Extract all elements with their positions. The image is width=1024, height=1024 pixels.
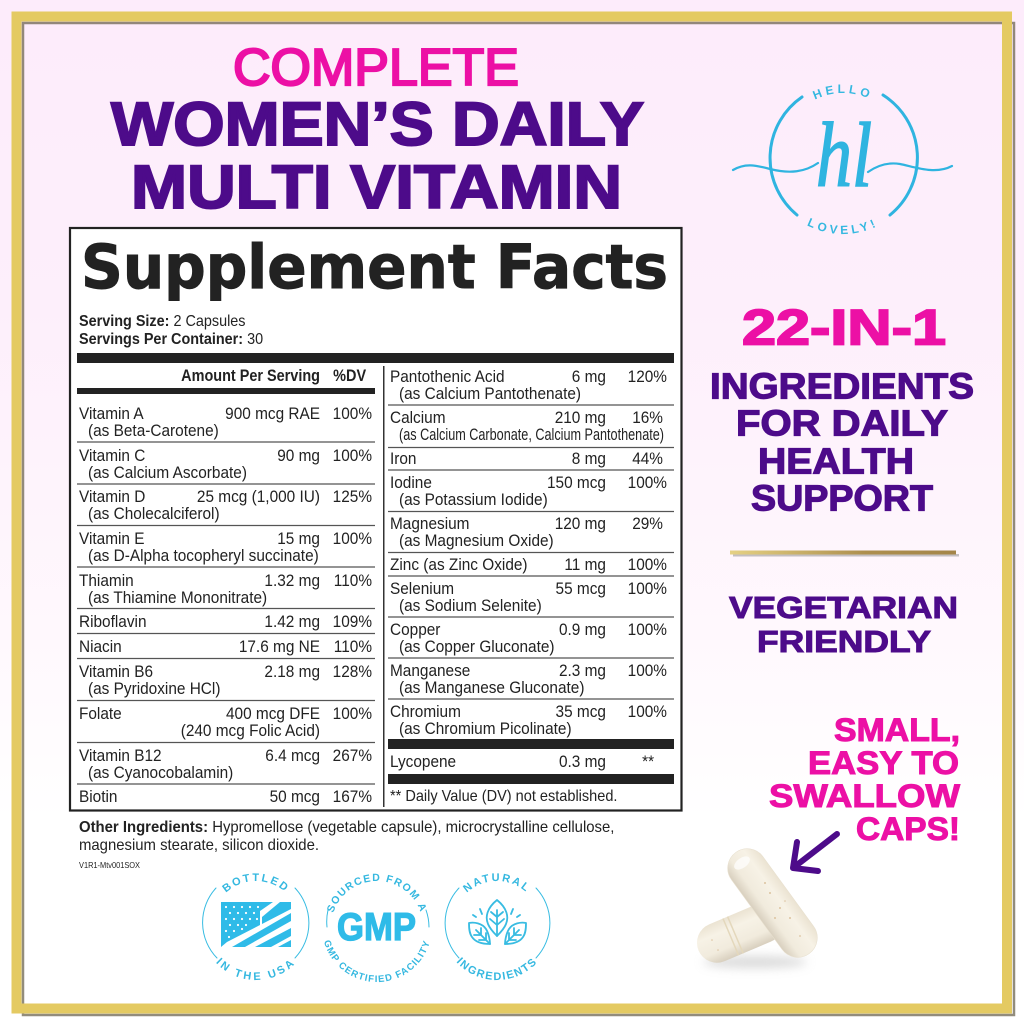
arrow (793, 834, 837, 871)
row: biotin: 50 mcg (270, 787, 320, 806)
icon: leaves (469, 900, 526, 944)
row: vitamin C: 90 mg (277, 446, 320, 465)
row: calcium: Calcium (390, 408, 446, 427)
row: biotin (79, 787, 372, 806)
text block: ingredients for daily health support: SUPPORT (751, 478, 933, 518)
row: vitamin E: (as D-Alpha tocopheryl succinate) (88, 546, 319, 565)
row: vitamin B12: 267% (333, 746, 372, 765)
row: vitamin C: (as Calcium Ascorbate) (88, 463, 247, 482)
row: magnesium (390, 514, 663, 550)
row: iron: 8 mg (572, 449, 606, 468)
row: thiamin: Thiamin (79, 571, 134, 590)
row: vitamin D (79, 487, 372, 523)
row: iodine: 100% (628, 473, 667, 492)
row: riboflavin: 109% (333, 612, 372, 631)
text block: ingredients for daily health support: FOR DAILY (736, 402, 948, 444)
row: chromium: (as Chromium Picolinate) (399, 719, 572, 738)
row: copper: (as Copper Gluconate) (399, 637, 555, 656)
row: magnesium: (as Magnesium Oxide) (399, 531, 554, 550)
lot code: V1R1-Mtv001SOX (79, 860, 140, 870)
row: chromium: Chromium (390, 702, 461, 721)
logo: Hello Lovely: HELLO (812, 84, 870, 100)
serving info (79, 313, 263, 348)
badge: bottled in the USA (202, 873, 310, 980)
row: vitamin D: (as Cholecalciferol) (88, 504, 220, 523)
row: lycopene: Lycopene (390, 752, 456, 771)
callout: small easy to swallow caps: SWALLOW (769, 778, 961, 814)
badge: natural ingredients: NATURAL (462, 873, 527, 892)
gold divider (730, 550, 959, 556)
row: vitamin E (79, 529, 372, 565)
column headers: Amount Per Serving (181, 367, 320, 385)
row: biotin: 167% (333, 787, 372, 806)
row: selenium: 55 mcg (556, 579, 606, 598)
row: folate: (240 mcg Folic Acid) (181, 721, 320, 740)
panel: supplement facts (70, 228, 682, 810)
badge: natural ingredients: INGREDIENTS (456, 957, 536, 980)
row: vitamin A: (as Beta-Carotene) (88, 421, 219, 440)
row: vitamin B6: Vitamin B6 (79, 662, 153, 681)
other ingredients: Other Ingredients: Hypromellose (vegetable capsule), microcrystalline cellulose, (79, 819, 614, 836)
text block: ingredients for daily health support (710, 366, 974, 518)
logo: Hello Lovely (732, 84, 954, 234)
row: copper: 0.9 mg (559, 620, 606, 639)
logo: Hello Lovely: LOVELY! (807, 218, 875, 234)
badge: bottled in the USA: BOTTLED (222, 873, 288, 892)
badge: bottled in the USA: IN THE USA (216, 958, 294, 980)
row: selenium (390, 579, 667, 615)
row: copper: 100% (628, 620, 667, 639)
row: magnesium: Magnesium (390, 514, 469, 533)
row: zinc: 100% (628, 555, 667, 574)
logo: Hello Lovely: hl (816, 104, 872, 206)
row: riboflavin: Riboflavin (79, 612, 147, 631)
row: folate (79, 704, 372, 740)
row: magnesium: 120 mg (555, 514, 606, 533)
row: manganese: 100% (628, 661, 667, 680)
row: iron: 44% (632, 449, 663, 468)
row: manganese: Manganese (390, 661, 470, 680)
row: folate: 400 mcg DFE (226, 704, 320, 723)
row: chromium (390, 702, 667, 738)
row: vitamin A: 900 mcg RAE (225, 404, 320, 423)
text block: vegetarian friendly: FRIENDLY (757, 624, 931, 659)
row: iron: Iron (390, 449, 416, 468)
row: vitamin A (79, 404, 372, 440)
capsules (691, 841, 825, 969)
callout: small easy to swallow caps (769, 712, 961, 847)
badge: GMP: SOURCED FROM A (327, 874, 426, 912)
row: lycopene: ** (642, 752, 655, 771)
icon: flag (221, 902, 291, 947)
row: vitamin D: 125% (333, 487, 372, 506)
row: lycopene (390, 752, 655, 771)
row: riboflavin (79, 612, 372, 631)
badge: natural ingredients (444, 873, 550, 980)
footnote: ** Daily Value (DV) not established. (390, 788, 617, 805)
badge: GMP: GMP CERTIFIED FACILITY (324, 940, 429, 982)
row: vitamin B6: 2.18 mg (264, 662, 320, 681)
row: thiamin: 110% (334, 571, 372, 590)
row: vitamin D: Vitamin D (79, 487, 145, 506)
row: selenium: 100% (628, 579, 667, 598)
serving info: Serving Size: 2 Capsules (79, 313, 245, 330)
callout: small easy to swallow caps: EASY TO (808, 745, 959, 781)
row: vitamin C: Vitamin C (79, 446, 146, 465)
column headers: %DV (333, 367, 367, 385)
row: pantothenic acid: 120% (628, 367, 667, 386)
row: biotin: Biotin (79, 787, 117, 806)
heading: supplement facts: Supplement Facts (81, 232, 668, 303)
row: vitamin B6 (79, 662, 372, 698)
row: lycopene: 0.3 mg (559, 752, 606, 771)
row: pantothenic acid: Pantothenic Acid (390, 367, 505, 386)
row: calcium (390, 408, 664, 444)
row: vitamin C (79, 446, 372, 482)
row: vitamin B6: 128% (333, 662, 372, 681)
row: copper: Copper (390, 620, 441, 639)
row: copper (390, 620, 667, 656)
row: vitamin B6: (as Pyridoxine HCl) (88, 679, 220, 698)
row: thiamin (79, 571, 372, 607)
row: niacin: Niacin (79, 637, 122, 656)
row: pantothenic acid: 6 mg (572, 367, 606, 386)
other ingredients: magnesium stearate, silicon dioxide. (79, 837, 319, 854)
row: manganese: 2.3 mg (559, 661, 606, 680)
row: vitamin B12: (as Cyanocobalamin) (88, 763, 233, 782)
row: niacin: 110% (334, 637, 372, 656)
text block: ingredients for daily health support: HEALTH (758, 440, 914, 482)
row: vitamin A: 100% (333, 404, 372, 423)
callout: small easy to swallow caps: SMALL, (834, 712, 960, 748)
row: pantothenic acid (390, 367, 667, 403)
row: calcium: 16% (632, 408, 663, 427)
row: niacin (79, 637, 372, 656)
row: chromium: 35 mcg (556, 702, 606, 721)
text block: ingredients for daily health support: INGREDIENTS (710, 366, 974, 406)
GMP text: GMP (337, 906, 416, 949)
row: zinc (390, 555, 667, 574)
row: chromium: 100% (628, 702, 667, 721)
badge: GMP (324, 874, 430, 982)
row: vitamin B12: 6.4 mcg (265, 746, 320, 765)
row: vitamin E: 15 mg (277, 529, 320, 548)
other ingredients (79, 819, 614, 854)
serving info: Servings Per Container: 30 (79, 331, 263, 348)
title: WOMEN’S DAILY (111, 90, 644, 158)
row: iodine: 150 mcg (547, 473, 606, 492)
row: manganese: (as Manganese Gluconate) (399, 678, 584, 697)
row: vitamin C: 100% (333, 446, 372, 465)
row: zinc: 11 mg (564, 555, 606, 574)
row: vitamin E: 100% (333, 529, 372, 548)
row: iodine (390, 473, 667, 509)
row: iron (390, 449, 663, 468)
row: calcium: 210 mg (555, 408, 606, 427)
row: manganese (390, 661, 667, 697)
row: thiamin: 1.32 mg (264, 571, 320, 590)
row: folate: Folate (79, 704, 122, 723)
text block: vegetarian friendly (729, 590, 958, 659)
row: vitamin B12: Vitamin B12 (79, 746, 162, 765)
text block: vegetarian friendly: VEGETARIAN (729, 590, 958, 625)
row: folate: 100% (333, 704, 372, 723)
row: niacin: 17.6 mg NE (239, 637, 320, 656)
row: zinc: Zinc (as Zinc Oxide) (390, 555, 528, 574)
row: vitamin B12 (79, 746, 372, 782)
callout: small easy to swallow caps: CAPS! (856, 811, 960, 847)
title (111, 39, 644, 221)
row: vitamin E: Vitamin E (79, 529, 145, 548)
row: vitamin A: Vitamin A (79, 404, 144, 423)
title: MULTI VITAMIN (131, 153, 622, 221)
column header bars (77, 353, 674, 807)
row: iodine: Iodine (390, 473, 432, 492)
row: iodine: (as Potassium Iodide) (399, 490, 548, 509)
title: COMPLETE (233, 39, 519, 97)
row: thiamin: (as Thiamine Mononitrate) (88, 588, 267, 607)
row: riboflavin: 1.42 mg (264, 612, 320, 631)
callout: 22-in-1: 22-IN-1 (742, 300, 946, 356)
row: pantothenic acid: (as Calcium Pantothenate) (399, 384, 581, 403)
row: calcium: (as Calcium Carbonate, Calcium Pantothenate) (399, 426, 664, 444)
row: selenium: (as Sodium Selenite) (399, 596, 542, 615)
row: magnesium: 29% (632, 514, 663, 533)
row: vitamin D: 25 mcg (1,000 IU) (197, 487, 320, 506)
row: selenium: Selenium (390, 579, 454, 598)
